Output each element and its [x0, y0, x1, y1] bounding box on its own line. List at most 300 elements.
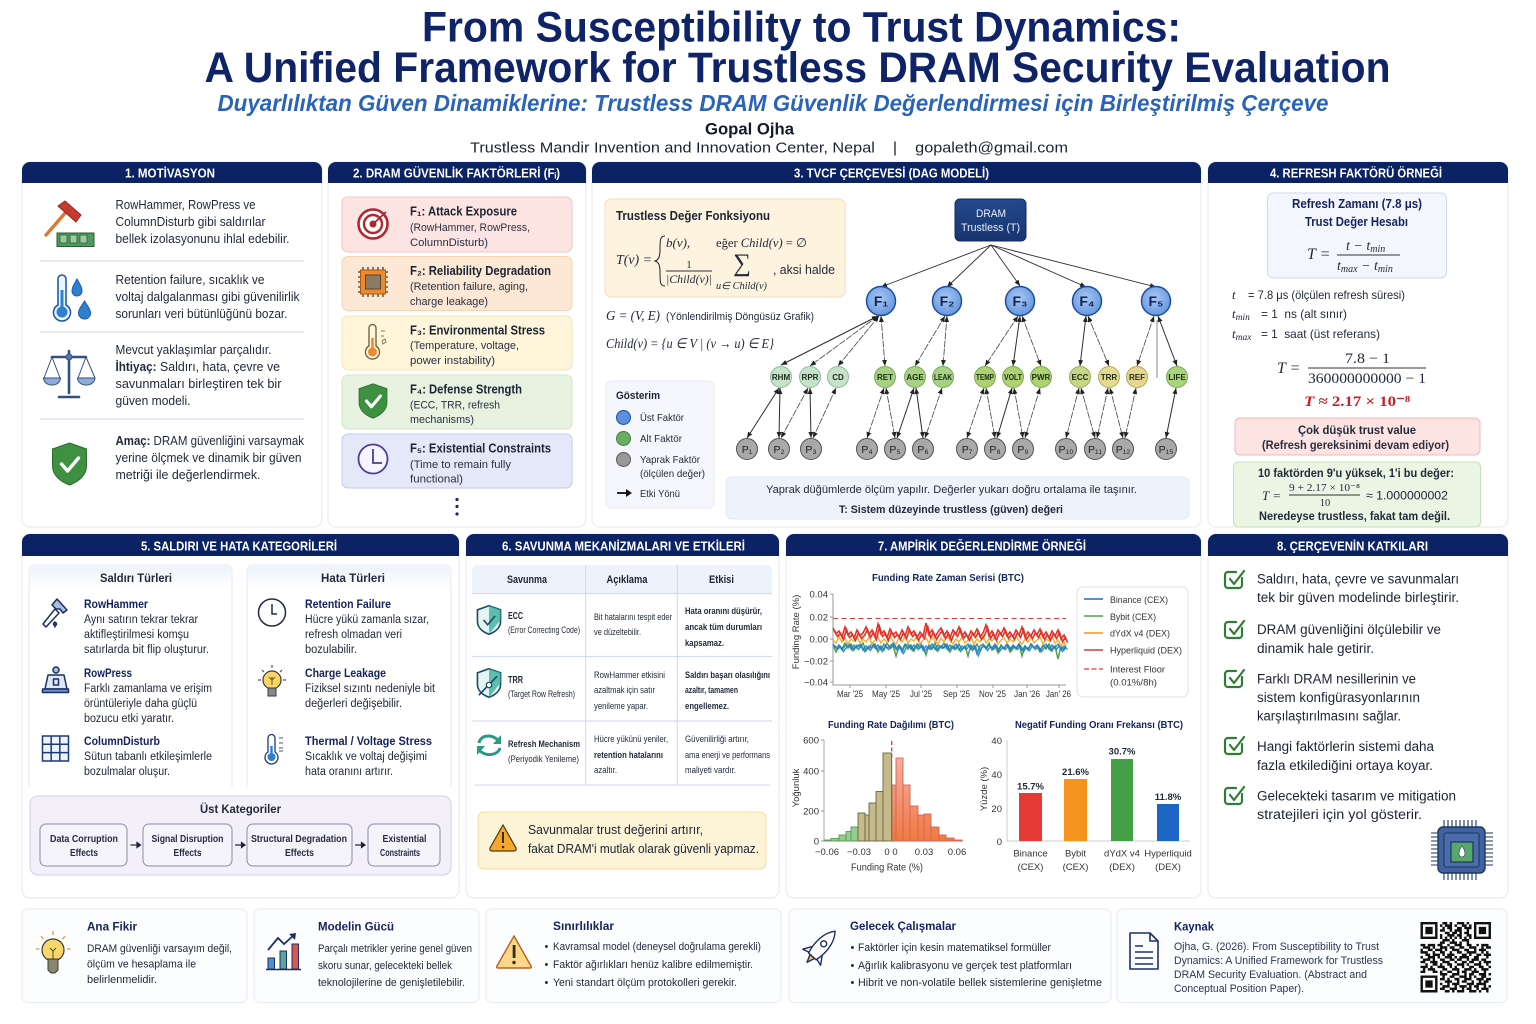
factor nodes: F₁: [874, 293, 888, 309]
card: source: Ojha, G. (2026). From Susceptibility to Trust: [1174, 941, 1379, 953]
factor card F5: [342, 434, 572, 488]
contribution 2: dinamik hale getirir.: [1257, 641, 1374, 656]
row: ECC: ECC: [508, 611, 523, 622]
chart legend: dYdX v4 (DEX): [1110, 628, 1170, 640]
icon: grid: [42, 736, 68, 761]
text: reliability: Retention failure, sıcaklık ve: [116, 273, 265, 287]
fault types: değerleri değişebilir.: [305, 698, 402, 710]
root node: DRAM: [976, 208, 1006, 220]
text: aim: DRAM güvenliğini varsaymak: [154, 434, 305, 448]
attack types: bozucu etki yaratır.: [84, 713, 174, 725]
chart: funding rate time series: Mar '25: [837, 689, 863, 700]
row: Refresh mechanism: [477, 734, 770, 776]
chart: histogram: 0.06: [948, 847, 966, 858]
factor nodes: F₅: [1149, 293, 1163, 309]
contribution 5: stratejileri için yol gösterir.: [1257, 807, 1422, 822]
factor card F3: power instability): [410, 355, 495, 367]
panel: framework contributions: [1208, 534, 1508, 898]
chart legend: Bybit (CEX): [1110, 612, 1156, 623]
sub-factor nodes: PWR: [1032, 373, 1051, 382]
attack types: ColumnDisturb: [84, 736, 160, 748]
row: ECC: (Error Correcting Code): [508, 625, 580, 636]
card: model strength: teknolojilerine de genişletilebilir.: [318, 977, 465, 989]
chart: funding rate time series: 0.04: [810, 590, 828, 600]
icon: document: [1130, 933, 1158, 969]
formula card: Refresh Zamanı (7.8 μs): [1292, 197, 1422, 211]
card: future work: •: [850, 960, 854, 972]
factor card F4: [342, 375, 572, 429]
row: TRR: azaltır, tamamen: [685, 685, 738, 696]
panel: attack and fault categories: 5. SALDIRI VE HATA KATEGORİLERİ: [141, 538, 337, 554]
variable definitions: = 1 ns (alt sınır): [1261, 307, 1347, 321]
leaf nodes: [736, 438, 1176, 460]
top categories: Existential: [382, 834, 427, 845]
leaf nodes: P₁₀: [1059, 444, 1073, 456]
panel: refresh factor example: [1208, 162, 1508, 527]
row: TRR: Saldırı başarı olasılığını: [685, 670, 770, 681]
title: [204, 4, 1390, 92]
chart: funding rate time series: Jan' 26: [1046, 689, 1071, 700]
factor nodes: [866, 286, 1170, 316]
row: ECC: Hata oranını düşürür,: [685, 606, 762, 617]
icon: press: [42, 667, 68, 692]
aggregate callout: [1234, 462, 1480, 527]
contribution 2: [1225, 621, 1441, 656]
panel: DRAM security factors: 2. DRAM GÜVENLİK FAKTÖRLERİ (Fᵢ): [353, 166, 560, 180]
panel: refresh factor example: 4. REFRESH FAKTÖRÜ ÖRNEĞİ: [1270, 166, 1442, 180]
card: future work: Gelecek Çalışmalar: [850, 919, 956, 933]
child definition: Child(v) = {u ∈ V | (v → u) ∈ E}: [606, 337, 774, 352]
contribution 4: Hangi faktörlerin sistemi daha: [1257, 739, 1434, 754]
row: TRR: TRR: [508, 675, 524, 686]
chart: negative funding frequency: (CEX): [1063, 862, 1088, 873]
card: limitations: Yeni standart ölçüm protokolleri gerekir.: [553, 977, 737, 989]
text: reliability: voltaj dalgalanması gibi güvenilirlik: [116, 290, 300, 304]
card: source: [1117, 909, 1507, 1002]
chart: negative funding frequency: Binance: [1013, 848, 1048, 860]
variable definitions: max: [1236, 333, 1252, 343]
panel: attack and fault categories: [22, 534, 459, 898]
row: TRR: engellemez.: [685, 701, 729, 712]
card: source: Dynamics: A Unified Framework for Trustless: [1174, 955, 1383, 967]
sub-factor nodes: AGE: [906, 373, 924, 382]
row: Refresh mechanism: Güvenilirliği artırır,: [685, 734, 749, 745]
row: Refresh mechanism: (Periyodik Yenileme): [508, 754, 579, 765]
factor card F4: F₄: Defense Strength: [410, 382, 522, 396]
card: limitations: [486, 909, 781, 1002]
card: future work: Hibrit ve non-volatile bellek sistemlerine genişletme: [858, 977, 1102, 989]
DAG note: [726, 477, 1189, 519]
factor card F2: F₂: Reliability Degradation: [410, 264, 551, 278]
fault types: Hata Türleri: [321, 571, 385, 585]
sub-factor nodes: RHM: [772, 373, 790, 382]
card: future work: Faktörler için kesin matematiksel formüller: [858, 942, 1051, 954]
row: Refresh mechanism: ama enerji ve performans: [685, 750, 770, 761]
calculation: 7.8 − 1: [1345, 351, 1390, 367]
chart: negative funding frequency: Yüzde (%): [979, 767, 990, 811]
attack types: Farklı zamanlama ve erişim: [84, 683, 212, 695]
row: TRR: RowHammer etkisini: [594, 670, 665, 681]
text: need: İhtiyaç:: [116, 359, 156, 374]
chart: funding rate time series: [791, 572, 1071, 700]
graph definition: [606, 309, 814, 324]
legend: Etki Yönü: [640, 488, 680, 500]
chart legend: (0.01%/8h): [1110, 678, 1157, 688]
fault types: [247, 565, 451, 787]
sub-factor nodes: LEAK: [934, 373, 952, 382]
legend: Alt Faktör: [640, 433, 682, 445]
category arrows: [130, 842, 365, 848]
chart: negative funding frequency: 30.7%: [1109, 746, 1136, 758]
chart: histogram: −0.06: [815, 847, 839, 858]
panel: motivation: 1. MOTİVASYON: [125, 166, 215, 180]
fault types: refresh olmadan veri: [305, 629, 402, 641]
chart: negative funding frequency: 40: [991, 770, 1002, 781]
chart: negative funding frequency: 21.6%: [1062, 767, 1090, 778]
top categories: [30, 796, 451, 875]
text: aim: [116, 434, 305, 482]
card: limitations: •: [544, 977, 548, 989]
row: ECC: ve düzeltebilir.: [594, 627, 641, 638]
chart: negative funding frequency: 20: [991, 804, 1002, 815]
attack types: RowPress: [84, 668, 132, 680]
defense table: Açıklama: [606, 574, 648, 586]
icon: scales: [44, 351, 95, 397]
factor nodes: F₂: [940, 293, 954, 309]
formula card: t − t: [1346, 239, 1370, 254]
formula card: max: [1341, 264, 1358, 275]
contribution 3: Farklı DRAM nesillerinin ve: [1257, 672, 1416, 686]
row: ECC: kapsamaz.: [685, 638, 724, 649]
row: Refresh mechanism: retention hatalarını: [594, 750, 663, 761]
formula box: 1: [686, 259, 692, 271]
chart: negative funding frequency: [979, 719, 1192, 873]
chart: histogram: 0.03: [915, 847, 933, 858]
card: limitations: Kavramsal model (deneysel doğrulama gerekli): [553, 941, 761, 953]
aggregate callout: 9 + 2.17 × 10⁻⁸: [1289, 483, 1360, 494]
row: TRR: yenileme yapar.: [594, 701, 648, 712]
leaf nodes: P₆: [917, 444, 929, 456]
chart: funding rate time series: May '25: [872, 689, 900, 700]
chart: negative funding frequency: (CEX): [1018, 862, 1043, 873]
formula box: T(v) =: [616, 252, 652, 267]
sub-factor nodes: RET: [877, 373, 893, 382]
leaf nodes: P₃: [805, 444, 817, 456]
leaf nodes: P₅: [889, 444, 901, 456]
top categories: Effects: [285, 848, 314, 859]
panel: motivation: [22, 162, 322, 527]
row: Refresh mechanism: maliyeti vardır.: [685, 765, 736, 776]
chart legend: [1077, 587, 1188, 697]
variable definitions: t: [1232, 326, 1236, 341]
fault types: Thermal / Voltage Stress: [305, 736, 432, 748]
attack types: aktifleştirilmesi komşu: [84, 629, 189, 641]
formula card: − t: [1358, 259, 1379, 274]
edges: sub-factors to leaves: [747, 388, 1176, 438]
defense table: Etkisi: [709, 574, 734, 586]
card: model strength: Parçalı metrikler yerine genel güven: [318, 943, 472, 955]
formula box: eğer Child(v) = ∅: [716, 236, 807, 250]
panel: DRAM security factors: [328, 162, 586, 527]
card: main idea: [22, 909, 247, 1002]
row: TRR: [477, 669, 770, 712]
card: model strength: Modelin Gücü: [318, 920, 394, 934]
card: source: DRAM Security Evaluation. (Abstract and: [1174, 969, 1367, 981]
row: TRR: (Target Row Refresh): [508, 689, 575, 700]
formula card: min: [1378, 264, 1393, 275]
contribution 4: fazla etkilediğini ortaya koyar.: [1257, 758, 1433, 773]
row: ECC: Bit hatalarını tespit eder: [594, 612, 672, 623]
card: limitations: Faktör ağırlıkları henüz kalibre edilmemiştir.: [553, 959, 753, 971]
factor card F3: (Temperature, voltage,: [410, 340, 519, 352]
fault types: Hücre yükü zamanla sızar,: [305, 614, 429, 626]
sub-factor nodes: TEMP: [976, 373, 995, 382]
top categories: Üst Kategoriler: [200, 801, 281, 816]
icon: secure chip: [1431, 820, 1493, 880]
row: ECC: ancak tüm durumları: [685, 622, 762, 633]
edges: root to factors: [881, 245, 1156, 287]
root node: [955, 199, 1026, 241]
card: future work: •: [850, 977, 854, 989]
affiliation: Trustless Mandir Invention and Innovation Center, Nepal | gopaleth@gmail.com: [470, 140, 1068, 156]
DAG note: T: Sistem düzeyinde trustless (güven) değeri: [839, 504, 1063, 516]
leaf nodes: P₁₁: [1088, 444, 1102, 456]
icon: thermometer and drops: [54, 275, 90, 321]
aggregate callout: Neredeyse trustless, fakat tam değil.: [1259, 511, 1450, 523]
variable definitions: = 7.8 μs (ölçülen refresh süresi): [1248, 288, 1405, 302]
card: main idea: Ana Fikir: [87, 920, 137, 934]
panel: framework contributions: 8. ÇERÇEVENİN KATKILARI: [1277, 538, 1428, 554]
attack types: Sütun tabanlı etkileşimlerle: [84, 751, 212, 763]
chart: histogram: −0.03: [847, 847, 871, 858]
fault types: Fiziksel sızıntı nedeniyle bit: [305, 683, 436, 695]
icon: thermometer: [265, 734, 283, 764]
card: limitations: Sınırlılıklar: [553, 919, 614, 933]
icon: hammer: [43, 599, 67, 627]
chart: funding rate time series: 0.00: [810, 634, 828, 646]
row: Refresh mechanism: Refresh Mechanism: [508, 739, 580, 750]
card: main idea: DRAM güvenliği varsayım değil,: [87, 943, 232, 955]
root node: Trustless (T): [961, 222, 1020, 234]
row: TRR: azaltmak için satır: [594, 685, 655, 696]
sub-factor nodes: ECC: [1072, 373, 1089, 382]
calculation: 360000000000 − 1: [1308, 371, 1426, 387]
contribution 3: [1225, 670, 1420, 724]
icon: bulb: [36, 931, 70, 973]
panel: defense mechanisms: [466, 534, 779, 898]
chart: histogram: [791, 719, 966, 874]
text: aim: yerine ölçmek ve dinamik bir güven: [116, 451, 302, 465]
formula box: ∑: [733, 250, 751, 277]
calculation: T =: [1277, 360, 1300, 377]
leaf nodes: P₂: [773, 444, 785, 456]
legend: Üst Faktör: [640, 412, 684, 424]
formula card: Trust Değer Hesabı: [1305, 215, 1408, 229]
attack types: Aynı satırın tekrar tekrar: [84, 614, 198, 626]
sub-factor nodes: VOLT: [1004, 373, 1022, 382]
sub-factor nodes: CD: [832, 373, 844, 382]
factor card F1: (RowHammer, RowPress,: [410, 222, 530, 234]
aggregate callout: 10 faktörden 9'u yüksek, 1'i bu değer:: [1258, 468, 1454, 480]
text: aim: metriği ile değerlendirmek.: [116, 468, 260, 482]
card: future work: •: [850, 942, 854, 954]
calculation: [1277, 351, 1426, 387]
panel: defense mechanisms: 6. SAVUNMA MEKANİZMALARI VE ETKİLERİ: [502, 538, 745, 554]
fault types: hata oranını artırır.: [305, 766, 393, 778]
chart: histogram: Funding Rate (%): [851, 862, 923, 874]
attack types: bozulmalar oluşur.: [84, 766, 170, 778]
chart: negative funding frequency: (DEX): [1155, 862, 1181, 873]
low trust callout: [1235, 418, 1480, 455]
leaf nodes: P₈: [989, 444, 1001, 456]
defense table: Savunma: [507, 574, 548, 586]
card: source: Kaynak: [1174, 920, 1214, 934]
chart: funding rate time series: Funding Rate (%): [791, 595, 802, 669]
chart legend: Interest Floor: [1110, 664, 1165, 676]
DAG diagram: [736, 199, 1188, 460]
author: Gopal Ojha: [705, 120, 795, 138]
contribution 5: Gelecekteki tasarım ve mitigation: [1257, 788, 1456, 804]
chart: funding rate time series: 0.02: [810, 612, 828, 624]
aggregate callout: ≈ 1.000000002: [1366, 488, 1448, 502]
formula box: |Child(v)|: [666, 274, 712, 286]
chart: negative funding frequency: 40: [991, 736, 1002, 747]
chart: histogram: 400: [803, 766, 819, 778]
factor nodes: F₃: [1012, 293, 1028, 309]
chart: histogram: Yoğunluk: [791, 768, 802, 807]
variable definitions: min: [1236, 313, 1250, 323]
variable definitions: t: [1232, 287, 1236, 302]
text: need: [116, 343, 282, 408]
chart: funding rate time series: Jan '26: [1014, 689, 1040, 700]
legend: Yaprak Faktör: [640, 454, 700, 466]
attack types: örüntüleriyle daha güçlü: [84, 698, 197, 710]
card: future work: Ağırlık kalibrasyonu ve gerçek test platformları: [858, 960, 1072, 972]
leaf nodes: P₁₂: [1116, 444, 1130, 456]
chart: histogram: 200: [803, 806, 819, 818]
chart legend: Hyperliquid (DEX): [1110, 646, 1182, 656]
subtitle: Duyarlılıktan Güven Dinamiklerine: Trustless DRAM Güvenlik Değerlendirmesi için Birleştirilmiş Çerçeve: [218, 90, 1329, 116]
top categories: Effects: [70, 848, 98, 859]
low trust callout: Çok düşük trust value: [1298, 425, 1416, 437]
legend: Gösterim: [616, 390, 660, 402]
chart: histogram: 600: [803, 736, 819, 746]
DAG note: Yaprak düğümlerde ölçüm yapılır. Değerler yukarı doğru ortalama ile taşınır.: [766, 484, 1137, 496]
text: need: Saldırı, hata, çevre ve: [160, 360, 280, 374]
factor card F5: functional): [410, 474, 463, 486]
defense table: [472, 565, 772, 785]
variable definitions: [1232, 287, 1405, 343]
chart: histogram: Funding Rate Dağılımı (BTC): [828, 719, 954, 731]
attack types: Saldırı Türleri: [100, 571, 172, 585]
formula card: min: [1370, 244, 1385, 255]
text: need: savunmaları birleştiren tek bir: [116, 377, 282, 391]
fault types: Charge Leakage: [305, 668, 386, 680]
icon: warning: [497, 936, 531, 968]
sub-factor nodes: RPR: [802, 373, 819, 382]
chart: funding rate time series: −0.02: [804, 656, 828, 668]
leaf nodes: P₁₅: [1159, 444, 1173, 456]
row: Refresh mechanism: Hücre yükünü yeniler,: [594, 734, 668, 745]
formula card: T =: [1307, 246, 1330, 263]
formula box: Trustless Değer Fonksiyonu: [616, 209, 770, 223]
QR code: [1420, 923, 1491, 991]
leaf nodes: P₉: [1017, 444, 1029, 456]
aggregate callout: T =: [1262, 488, 1281, 503]
panel: TVCF framework: 3. TVCF ÇERÇEVESİ (DAG MODELİ): [794, 166, 989, 180]
fault types: bozulabilir.: [305, 644, 357, 656]
chart: funding rate time series: Nov '25: [979, 689, 1006, 700]
factor card F1: F₁: Attack Exposure: [410, 204, 517, 218]
formula box: , aksi halde: [773, 263, 835, 277]
row: ECC: [477, 606, 762, 649]
panel: TVCF framework: [592, 162, 1201, 527]
contribution 3: sistem konfigürasyonlarının: [1257, 690, 1420, 705]
text: attacks: RowHammer, RowPress ve: [116, 198, 256, 212]
factor card F2: (Retention failure, aging,: [410, 281, 528, 293]
factor card F3: F₃: Environmental Stress: [410, 324, 545, 338]
leaf nodes: P₄: [861, 444, 873, 456]
icon: growth chart: [266, 933, 301, 970]
legend: (ölçülen değer): [640, 468, 705, 480]
text: reliability: sorunları veri bütünlüğünü bozar.: [116, 307, 288, 321]
chart legend: Binance (CEX): [1110, 595, 1168, 606]
contribution 1: [1225, 571, 1459, 605]
formula card: t: [1337, 259, 1341, 274]
factor card F5: F₅: Existential Constraints: [410, 442, 551, 456]
attack types: [29, 565, 232, 787]
formula box: u∈ Child(v): [716, 281, 768, 292]
formula box: [605, 199, 845, 297]
factor card F2: [342, 256, 572, 310]
card: model strength: skoru sunar, gelecekteki bellek: [318, 960, 452, 972]
low trust callout: (Refresh gereksinimi devam ediyor): [1262, 440, 1449, 452]
icon: rocket: [798, 923, 844, 970]
icon: clock: [258, 599, 286, 626]
text: attacks: ColumnDisturb gibi saldırılar: [116, 215, 266, 229]
panel: empirical evaluation: 7. AMPİRİK DEĞERLENDİRME ÖRNEĞİ: [878, 538, 1086, 554]
warning callout: Savunmalar trust değerini artırır,: [528, 823, 703, 837]
chart: histogram: 0: [814, 836, 819, 848]
card: source: Conceptual Position Paper).: [1174, 983, 1304, 995]
text: need: Mevcut yaklaşımlar parçalıdır.: [116, 343, 272, 357]
factor card F3: [342, 316, 572, 370]
graph definition: G = (V, E): [606, 309, 660, 324]
card: main idea: ölçüm ve hesaplama ile: [87, 958, 196, 970]
chart: funding rate time series: Funding Rate Zaman Serisi (BTC): [872, 572, 1024, 584]
chart: negative funding frequency: (DEX): [1109, 862, 1135, 873]
leaf nodes: P₁: [742, 444, 753, 456]
factor card F2: charge leakage): [410, 296, 488, 308]
sub-factor nodes: TRR: [1101, 373, 1117, 382]
chart: negative funding frequency: 0: [997, 837, 1002, 848]
icon: light bulb: [258, 665, 286, 696]
formula card: [1268, 193, 1446, 278]
top categories: Constraints: [380, 848, 420, 859]
text: attacks: [116, 198, 290, 246]
chart: funding rate time series: −0.04: [804, 678, 828, 688]
variable definitions: t: [1232, 306, 1236, 321]
text: reliability: [116, 273, 300, 321]
edges: factors to sub-factors: [781, 316, 1177, 378]
top categories: Structural Degradation: [251, 834, 347, 845]
card: limitations: •: [544, 959, 548, 971]
chart: negative funding frequency: dYdX v4: [1104, 848, 1140, 860]
title: From Susceptibility to Trust Dynamics:: [422, 4, 1181, 52]
leaf nodes: P₇: [962, 444, 973, 456]
factor card F1: [342, 197, 572, 252]
attack types: satırlarda bit flip oluşturur.: [84, 644, 209, 656]
